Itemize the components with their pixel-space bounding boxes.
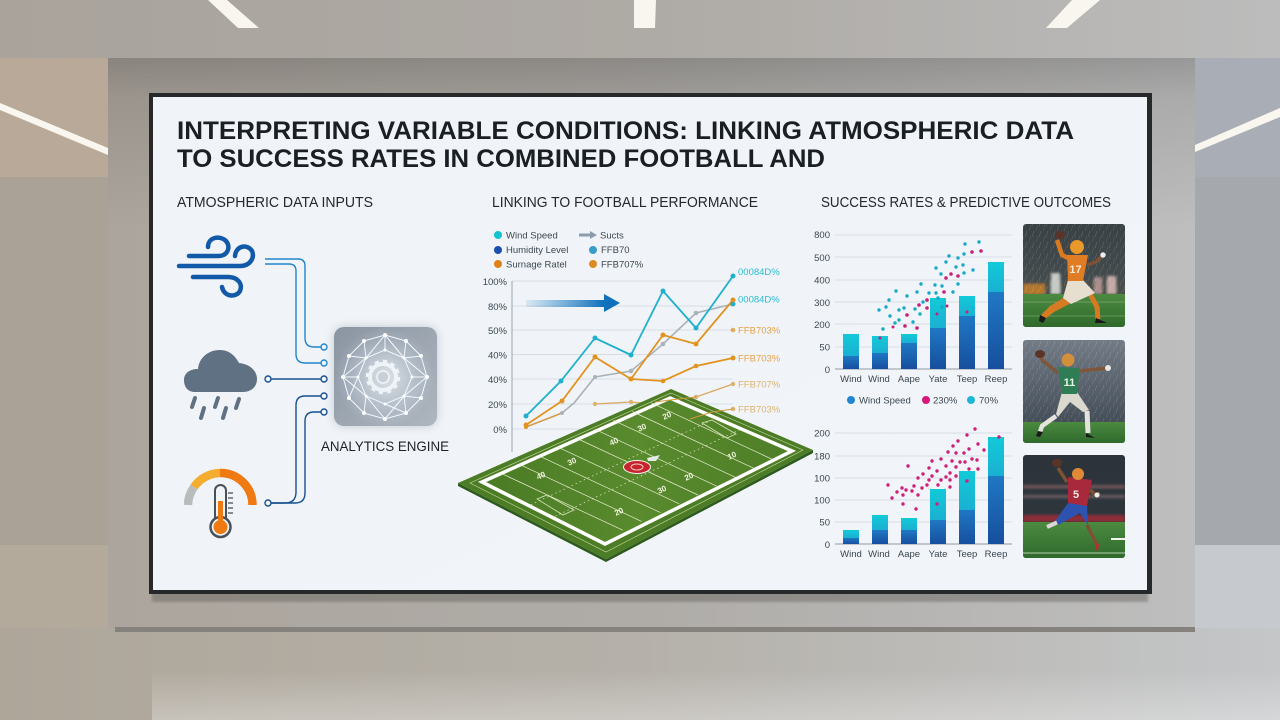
photo: red player: 5 [1073, 489, 1079, 501]
bar chart: top: Wind [868, 374, 890, 385]
icon: thermometer gauge [188, 473, 252, 537]
line chart end labels: 00084D% [738, 294, 780, 306]
football field: 20 [683, 471, 695, 483]
arrow: trend [526, 294, 620, 312]
bar chart: top: 50 [819, 342, 830, 354]
scatter legend: 230% [933, 396, 958, 406]
line chart legend: FFB70 [601, 245, 630, 256]
line chart: 50% [488, 326, 508, 337]
panel: success rates and predictive outcomes [814, 195, 1125, 560]
football field: 20 [613, 506, 625, 518]
wall panel [108, 58, 1195, 627]
field centre logo [624, 455, 660, 474]
connector lines [265, 259, 327, 506]
bar chart: top: Yate [929, 374, 947, 385]
bar chart: bottom [814, 427, 1012, 560]
bar chart: bottom: Yate [929, 549, 947, 560]
heading: atmospheric data inputs: ATMOSPHERIC DATA INPUTS [177, 195, 373, 211]
scatter points: top [877, 240, 981, 331]
bar chart: top: 300 [814, 298, 830, 309]
line chart: 100% [483, 277, 508, 288]
bar chart: bottom: 50 [819, 518, 830, 528]
bar chart: bottom: 0 [825, 540, 830, 551]
line chart end labels [738, 267, 781, 416]
line chart legend: FFB707% [601, 260, 644, 270]
bar chart: top: Aape [898, 374, 920, 385]
icon: rain cloud [184, 350, 257, 418]
football field: 40 [608, 436, 620, 448]
title [177, 117, 1074, 173]
title: TO SUCCESS RATES IN COMBINED FOOTBALL AND [177, 145, 825, 173]
line chart end labels: FFB703% [738, 404, 781, 416]
bar chart: top: 800 [814, 230, 830, 241]
bar chart: top: Reep [985, 374, 1007, 385]
line chart: 40% [488, 375, 508, 386]
line chart: 0% [493, 425, 508, 436]
bar chart: top: Teep [957, 374, 977, 385]
photo: red player [1023, 455, 1125, 558]
bar chart: bottom: Teep [957, 549, 977, 560]
football field: 40 [535, 470, 547, 482]
bar chart: bottom: Wind [868, 549, 890, 560]
bar chart: top: 500 [814, 253, 830, 264]
analytics engine [334, 327, 437, 427]
bar chart: top [814, 230, 1012, 385]
photo: green player [1023, 340, 1125, 443]
line chart: 40% [488, 350, 508, 362]
scatter points: bottom [886, 427, 1001, 511]
photo: orange player: 17 [1069, 264, 1082, 276]
title: INTERPRETING VARIABLE CONDITIONS: LINKING ATMOSPHERIC DATA [177, 117, 1074, 145]
line chart legend: Wind Speed [506, 230, 558, 242]
label: analytics engine: ANALYTICS ENGINE [321, 438, 449, 454]
bar chart: bottom: Aape [898, 549, 920, 560]
line chart legend [494, 230, 644, 270]
bar chart: top: 0 [825, 365, 830, 376]
line chart legend: Humidity Level [506, 245, 568, 256]
bar chart: top: Wind [840, 374, 862, 385]
football field: 20 [661, 410, 673, 422]
bar chart: bottom: 100 [814, 496, 830, 506]
bar chart: top: 200 [814, 320, 830, 331]
scatter legend [847, 396, 999, 406]
football field: 10 [726, 450, 738, 462]
scatter legend: 70% [979, 396, 999, 406]
line chart end labels: FFB703% [738, 354, 781, 364]
football field [458, 389, 813, 562]
heading: linking to football performance: LINKING TO FOOTBALL PERFORMANCE [492, 195, 758, 211]
bar chart: bottom: 180 [814, 452, 830, 462]
display screen [149, 93, 1152, 594]
photo: green player: 11 [1064, 377, 1075, 389]
bar chart: bottom: 100 [814, 474, 830, 484]
line chart end labels: FFB707% [738, 380, 781, 390]
panel: linking to football performance [458, 195, 813, 562]
football field: 30 [656, 484, 668, 496]
photo: orange player [1023, 224, 1125, 327]
panel: atmospheric data inputs [177, 195, 449, 537]
heading: success rates: SUCCESS RATES & PREDICTIVE OUTCOMES [821, 195, 1111, 211]
bar chart: top: 400 [814, 276, 830, 286]
line chart: 20% [488, 400, 508, 411]
bar chart: bottom: Wind [840, 549, 862, 560]
line chart end labels: FFB703% [738, 326, 781, 336]
bar chart: bottom: Reep [985, 549, 1007, 560]
line chart: 80% [488, 302, 508, 313]
line chart [483, 267, 781, 452]
line chart end labels: 00084D% [738, 267, 780, 278]
line chart legend: Surnage Ratel [506, 260, 567, 270]
scatter legend: Wind Speed [859, 396, 911, 406]
icon: wind [179, 238, 253, 296]
football field: 30 [566, 456, 578, 468]
ceiling lights [0, 0, 1280, 155]
line chart legend: Sucts [600, 230, 624, 242]
bar chart: bottom: 200 [814, 428, 830, 440]
football field: 30 [636, 422, 648, 434]
